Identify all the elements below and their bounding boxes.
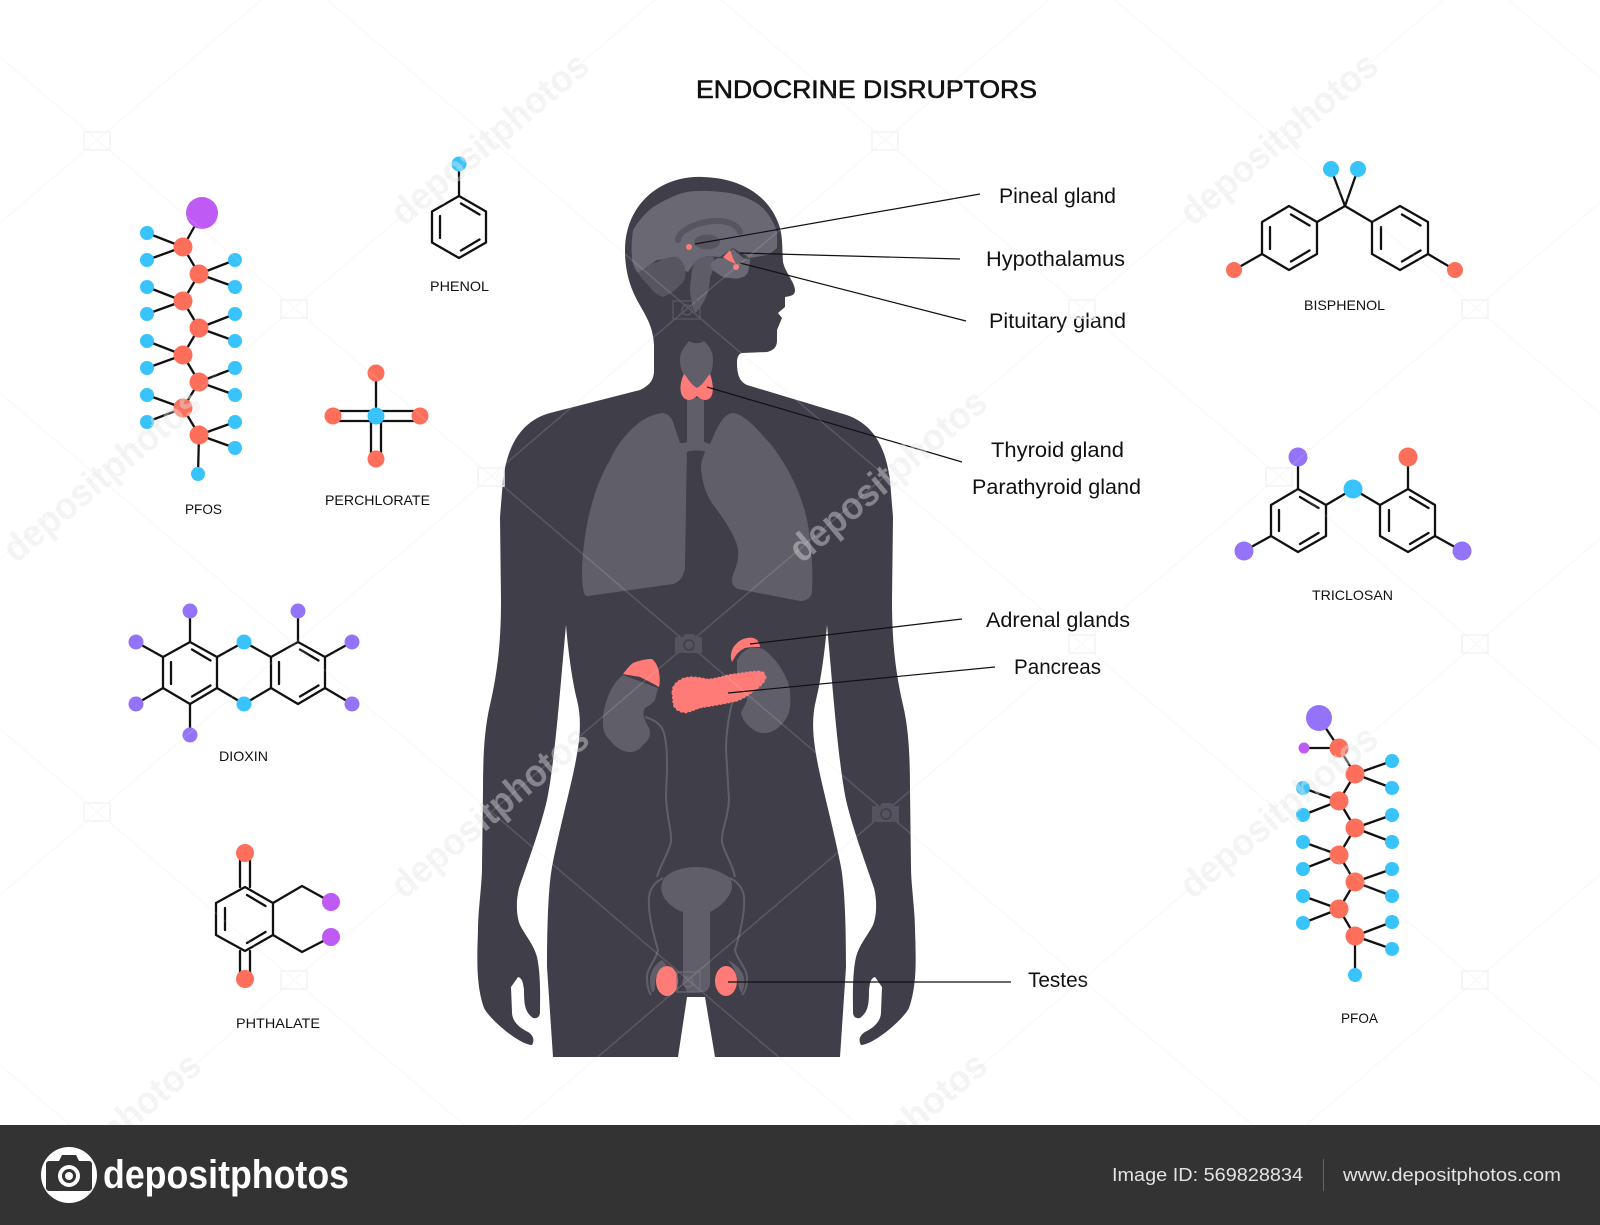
watermarks: depositphotos [1172,44,1386,234]
molecule: perchlorate [324,364,430,508]
pancreas [674,673,764,711]
molecule: phenol: PHENOL [430,278,489,294]
molecule: PFOA: PFOA [1341,1010,1379,1026]
website url: www.depositphotos.com [1342,1164,1561,1185]
title: ENDOCRINE DISRUPTORS [696,76,1037,104]
leader lines [695,194,1011,982]
molecule: dioxin [128,604,360,764]
gland labels: Pineal gland [999,185,1116,208]
molecule: PFOA [1296,705,1399,1026]
left lung [582,413,687,596]
thyroid gland [680,374,713,400]
body silhouette with organs [477,177,916,1057]
image id: Image ID: 569828834 [1112,1164,1303,1185]
molecule: phenol [430,156,489,294]
gland labels [972,185,1141,992]
watermarks: depositphotos [0,381,209,571]
left adrenal [623,659,660,687]
watermarks: depositphotos [383,717,597,907]
right lung [701,413,812,601]
watermarks: depositphotos [1172,717,1386,907]
larynx [680,341,713,390]
left vas deferens [647,878,663,995]
cerebellum [638,257,685,297]
right epididymis [728,960,744,993]
molecule: triclosan: TRICLOSAN [1312,587,1393,603]
gland labels: Testes [1028,969,1088,992]
right vas deferens [730,878,747,995]
gland labels: Hypothalamus [986,248,1125,271]
pituitary gland [733,264,739,270]
molecule: PFOS [140,197,242,517]
molecule: phthalate: PHTHALATE [236,1015,320,1031]
gland labels: Thyroid gland [991,439,1124,462]
footer divider [1323,1159,1324,1191]
right kidney [737,648,790,733]
gland labels: Parathyroid gland [972,476,1141,499]
pineal gland [686,244,692,250]
molecule: bisphenol [1226,161,1463,313]
left ureter [645,717,671,877]
left kidney [603,675,658,752]
footer logo icon [41,1147,97,1203]
corpus callosum [678,221,740,240]
brain stem [690,256,714,313]
molecule: phthalate [216,844,340,1031]
camera marks on white [84,132,1488,989]
molecule: triclosan [1234,448,1472,603]
left epididymis [650,960,667,992]
gland labels: Adrenal glands [986,609,1130,632]
molecule: PFOS: PFOS [185,501,222,517]
molecule: dioxin: DIOXIN [219,748,268,764]
thalamus [694,234,720,250]
hypothalamus [723,250,736,264]
gland labels: Pancreas [1014,656,1101,679]
left testis [656,966,678,996]
trachea [682,398,710,452]
right ureter [722,703,735,877]
watermarks: depositphotos [781,381,995,571]
midbrain [710,249,750,279]
molecule: perchlorate: PERCHLORATE [325,492,430,508]
footer logo text: depositphotos [103,1153,349,1197]
silhouette [477,177,916,1057]
bladder and penis [661,867,732,992]
right adrenal [731,638,760,662]
camera marks on the body [673,301,899,992]
right testis [715,966,737,996]
gland labels: Pituitary gland [989,310,1126,333]
brain [632,191,777,273]
footer bar [0,1125,1600,1225]
watermarks: depositphotos [383,44,597,234]
molecule: bisphenol: BISPHENOL [1304,297,1385,313]
